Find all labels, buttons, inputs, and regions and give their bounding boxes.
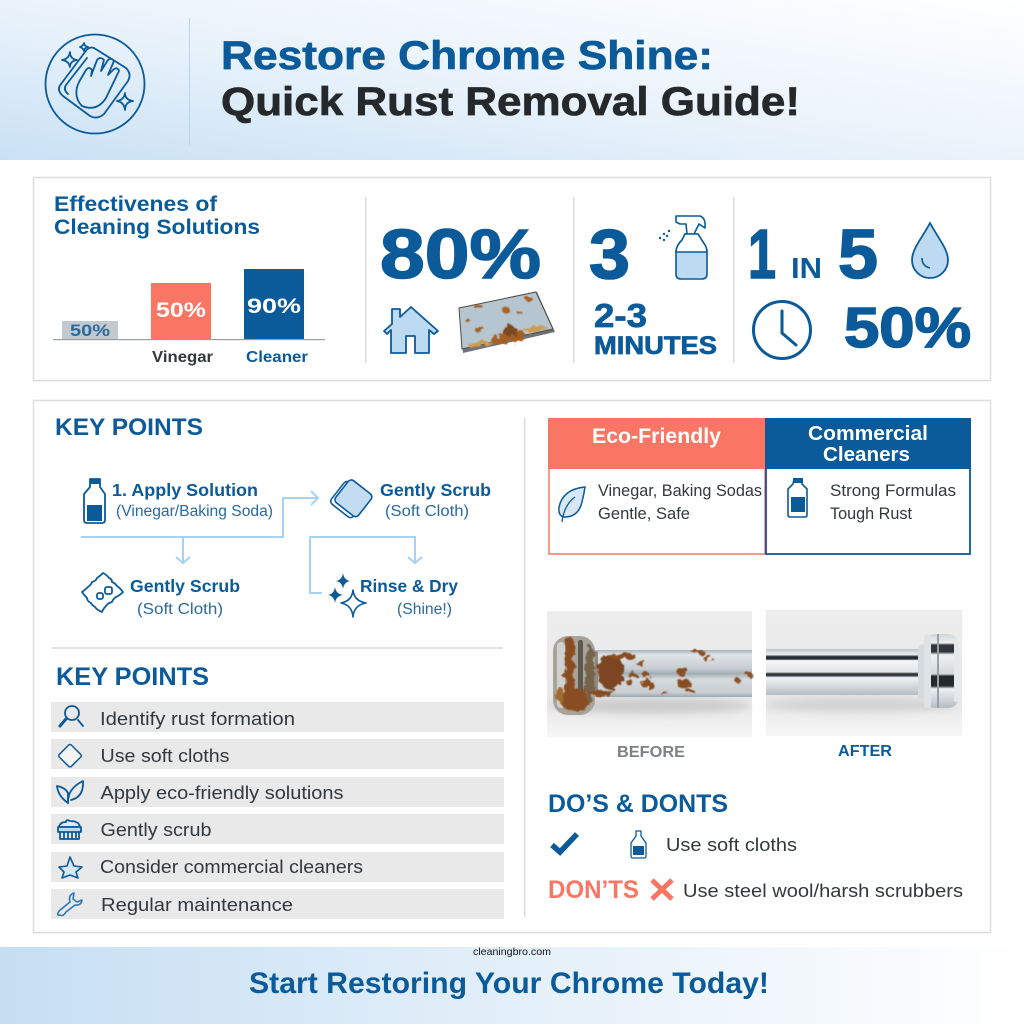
panel: statistics bbox=[34, 178, 990, 380]
stat: 2-3 minutes: 2-3 bbox=[594, 297, 647, 334]
column: commercial cleaners: Tough Rust bbox=[830, 505, 912, 523]
row: identify rust bbox=[51, 702, 504, 732]
row: eco friendly bbox=[51, 777, 504, 807]
icon: cross bbox=[652, 880, 672, 899]
row: soft cloths: Use soft cloths bbox=[100, 745, 230, 766]
flow diagram bbox=[81, 478, 491, 618]
header banner bbox=[0, 0, 1024, 160]
bar chart: Cleaner bbox=[246, 349, 308, 366]
step: gently scrub bbox=[380, 480, 491, 520]
bar chart bbox=[53, 269, 325, 366]
row: gently scrub: Gently scrub bbox=[100, 819, 212, 840]
step: gently scrub second: (Soft Cloth) bbox=[137, 601, 223, 618]
image: chrome pipe after bbox=[765, 610, 962, 736]
title: Restore Chrome Shine: bbox=[221, 34, 713, 78]
column: commercial cleaners: Commercial bbox=[808, 423, 928, 445]
step: rinse and dry: Rinse & Dry bbox=[360, 576, 458, 596]
do row bbox=[552, 831, 797, 858]
icon: sponge bbox=[82, 573, 123, 612]
heading: effectiveness: Cleaning Solutions bbox=[54, 216, 260, 239]
stat: 1 in 5 bbox=[748, 215, 878, 293]
icon: house bbox=[384, 307, 438, 353]
image: rusty pipe before bbox=[547, 611, 753, 737]
heading: key points process: KEY POINTS bbox=[55, 414, 203, 441]
column: eco-friendly: Eco-Friendly bbox=[592, 425, 721, 448]
dont row bbox=[548, 876, 963, 904]
icon: water drop bbox=[912, 223, 948, 278]
column: commercial cleaners: Cleaners bbox=[823, 444, 910, 466]
icon: hand wiping with cloth bbox=[46, 34, 144, 134]
bar chart: 50% bbox=[70, 321, 110, 340]
heading: dos and donts: DO’S & DONTS bbox=[548, 790, 728, 818]
footer banner bbox=[0, 946, 1024, 1024]
step: rinse and dry bbox=[360, 576, 458, 618]
stat: 2-3 minutes bbox=[594, 297, 717, 360]
do row: Use soft cloths bbox=[666, 834, 797, 855]
step: apply solution: 1. Apply Solution bbox=[112, 480, 258, 500]
stat: 3: 3 bbox=[589, 215, 630, 293]
icon: check bbox=[552, 834, 577, 852]
icon: bottle bbox=[84, 479, 105, 523]
step: gently scrub second bbox=[130, 576, 240, 618]
bar chart: Vinegar bbox=[152, 349, 213, 366]
label: before: BEFORE bbox=[617, 744, 685, 761]
stat: 2-3 minutes: MINUTES bbox=[594, 332, 717, 360]
step: gently scrub: Gently Scrub bbox=[380, 480, 491, 500]
icon: leaf bbox=[559, 487, 585, 522]
row: regular maintenance: Regular maintenance bbox=[101, 894, 293, 915]
stat: 1 in 5: 5 bbox=[838, 215, 878, 293]
source label: cleaningbro.com bbox=[473, 946, 551, 958]
bar chart: 90% bbox=[247, 295, 301, 318]
step: gently scrub: (Soft Cloth) bbox=[385, 503, 469, 520]
row: soft cloths bbox=[51, 739, 504, 769]
row: gently scrub bbox=[51, 814, 504, 844]
label: after: AFTER bbox=[838, 743, 892, 760]
row: eco friendly: Apply eco-friendly solutions bbox=[100, 782, 344, 803]
column: eco-friendly bbox=[548, 418, 765, 554]
icon: cloth bbox=[329, 478, 373, 519]
icon: clock bbox=[754, 302, 810, 358]
row: commercial cleaners: Consider commercial cleaners bbox=[100, 856, 363, 877]
step: apply solution bbox=[112, 480, 273, 520]
stat: 1 in 5: 1 bbox=[748, 215, 776, 293]
list: key points bbox=[51, 702, 504, 919]
panel: main content bbox=[34, 400, 990, 932]
arrows bbox=[81, 491, 422, 593]
step: rinse and dry: (Shine!) bbox=[397, 601, 452, 618]
step: apply solution: (Vinegar/Baking Soda) bbox=[116, 503, 273, 520]
dont row: DON’TS bbox=[548, 876, 639, 904]
title bbox=[221, 34, 800, 124]
image: rusty metal plate bbox=[459, 292, 555, 353]
comparison table bbox=[548, 418, 971, 554]
icon: small bottle bbox=[631, 831, 646, 858]
icon: cleaner bottle bbox=[788, 478, 807, 517]
step: gently scrub second: Gently Scrub bbox=[130, 576, 240, 596]
bar chart: 50% bbox=[156, 299, 206, 322]
dont row: Use steel wool/harsh scrubbers bbox=[683, 880, 963, 901]
title: Quick Rust Removal Guide! bbox=[221, 80, 800, 124]
column: commercial cleaners bbox=[765, 418, 971, 554]
stat: 50%: 50% bbox=[844, 296, 971, 360]
column: commercial cleaners: Strong Formulas bbox=[830, 482, 956, 500]
row: identify rust: Identify rust formation bbox=[100, 708, 295, 729]
call to action: Start Restoring Your Chrome Today! bbox=[249, 967, 769, 1000]
row: regular maintenance bbox=[51, 889, 504, 919]
stat: 1 in 5: IN bbox=[791, 253, 822, 285]
heading: effectiveness: Effectivenes of bbox=[54, 193, 218, 216]
icon: sparkles bbox=[328, 573, 366, 617]
row: commercial cleaners bbox=[51, 852, 504, 882]
heading: effectiveness bbox=[54, 193, 260, 239]
icon: spray bottle bbox=[659, 216, 707, 279]
column: eco-friendly: Vinegar, Baking Sodas bbox=[598, 482, 762, 500]
heading: key points list: KEY POINTS bbox=[56, 663, 209, 691]
stat: 80%: 80% bbox=[380, 215, 541, 293]
column: eco-friendly: Gentle, Safe bbox=[598, 505, 690, 523]
